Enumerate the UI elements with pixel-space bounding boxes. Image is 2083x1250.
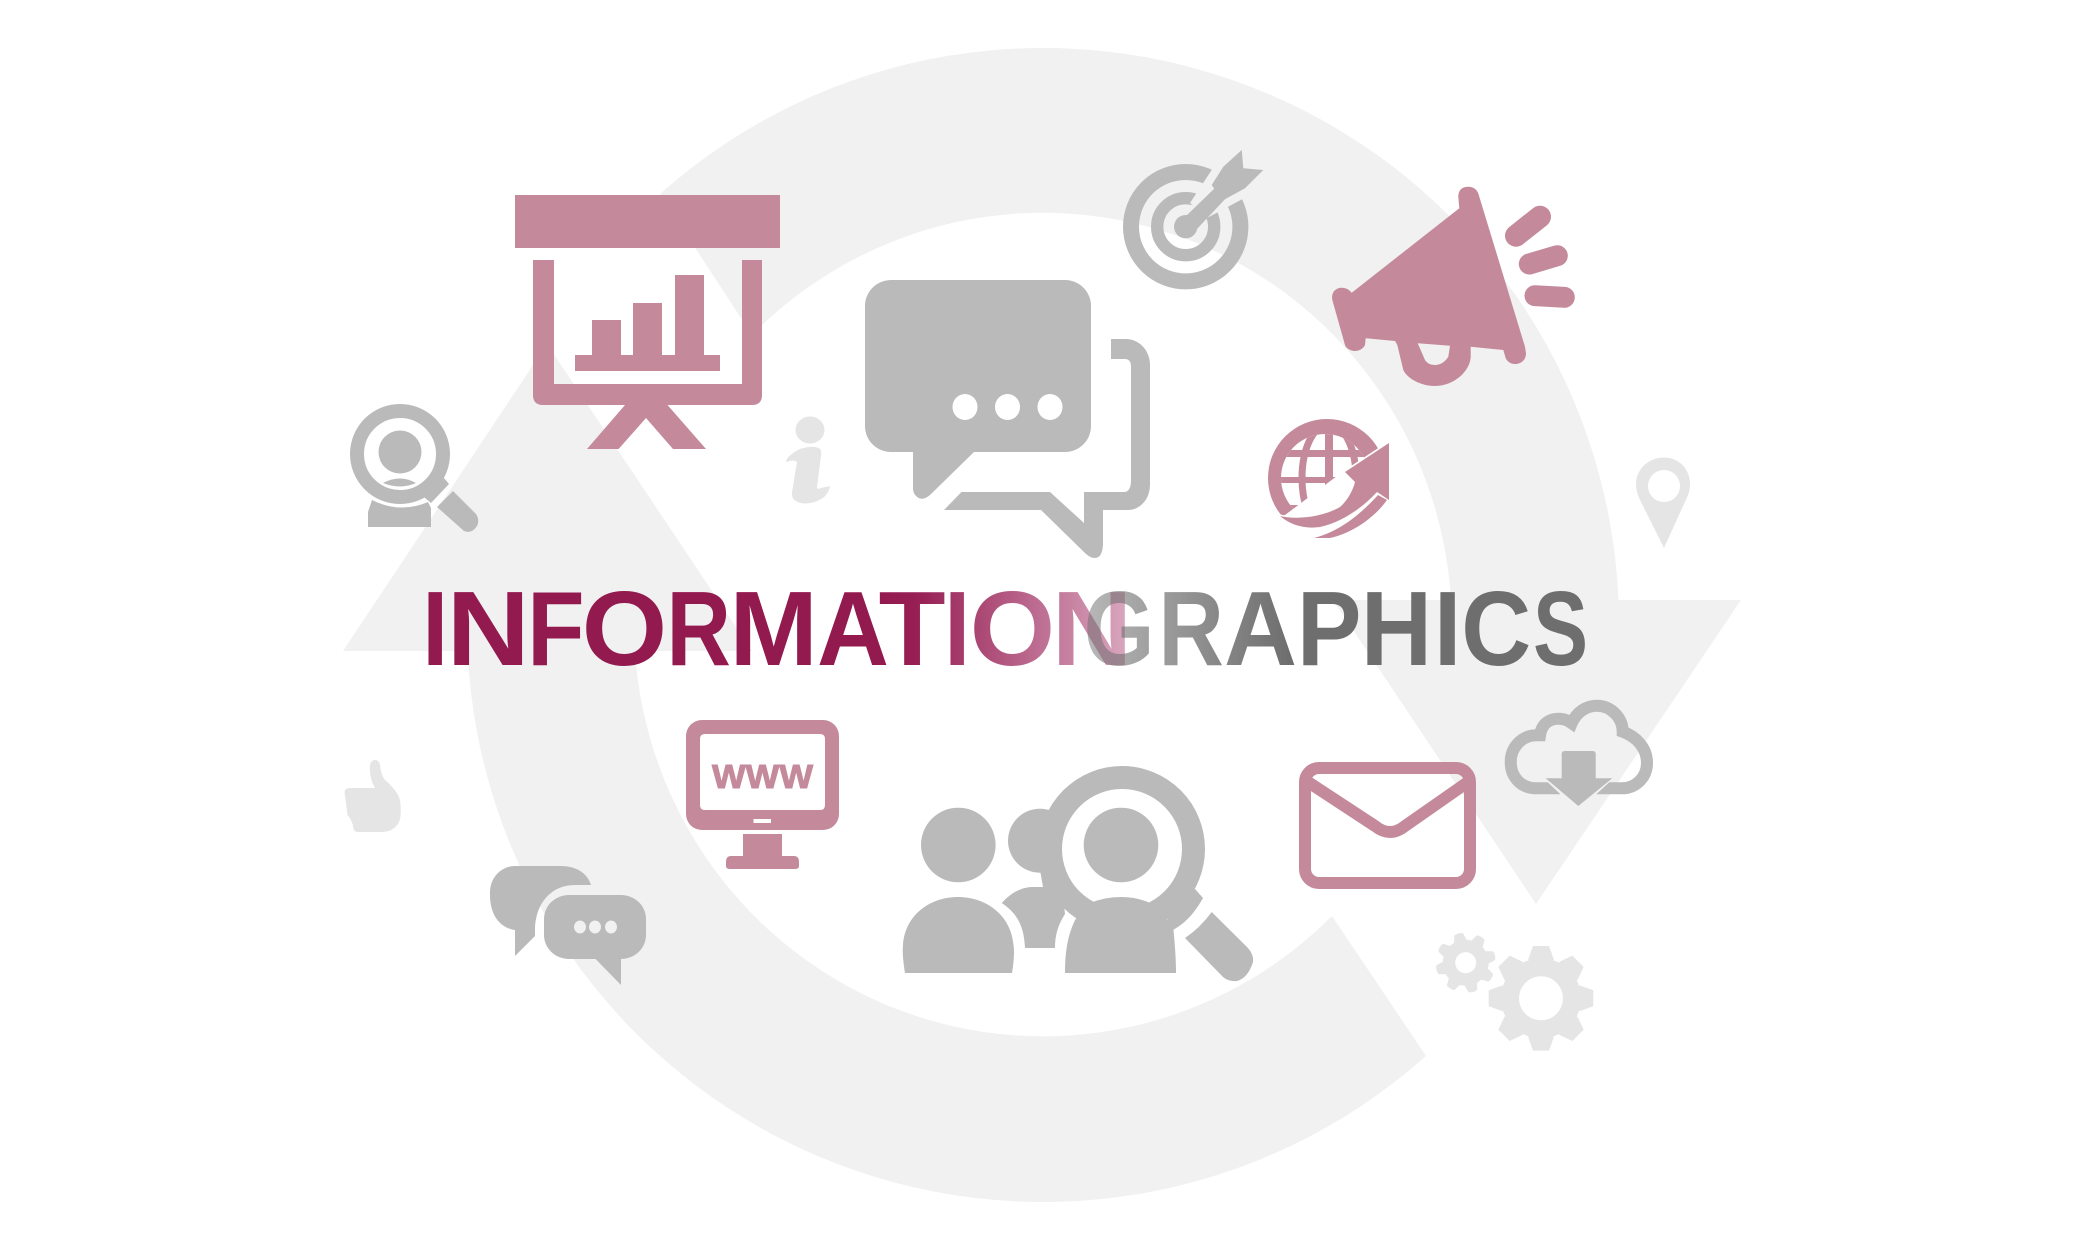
icon: speech bubbles with dots (865, 280, 1150, 558)
title word: graphics: A (1224, 570, 1297, 688)
title word: information: I (944, 570, 970, 688)
icon: thumbs up (344, 760, 401, 832)
icon: small speech bubbles (490, 866, 646, 985)
title word: information: I (422, 570, 448, 688)
title word: information: F (527, 570, 584, 688)
title word: graphics: H (1361, 570, 1432, 688)
icon: monitor with www (686, 720, 839, 869)
icon: map pin (1636, 458, 1690, 548)
title word: information: N (1052, 570, 1132, 688)
title word: information: A (817, 570, 889, 688)
icon: cloud download (1511, 706, 1647, 811)
title word: graphics: C (1461, 570, 1531, 688)
title word: graphics: G (1084, 570, 1154, 688)
title word: information: O (970, 570, 1055, 688)
icon: person in magnifier (357, 411, 478, 532)
title word: information: R (666, 570, 731, 688)
icon: large gear (1489, 946, 1593, 1051)
title word: information: M (730, 570, 818, 688)
www label: WWW (712, 758, 814, 795)
title word: graphics: I (1434, 570, 1462, 688)
background arrow: top arc (660, 48, 1741, 904)
icon: target with dart (1131, 150, 1263, 281)
title word: information: T (879, 570, 946, 688)
icon: presentation board with bar chart (515, 195, 780, 449)
title word: graphics: P (1297, 570, 1362, 688)
background arrow: bottom arc (343, 344, 1426, 1202)
icon: small gear (1429, 926, 1502, 999)
title word: information: N (447, 570, 530, 688)
icon: info letter (786, 416, 830, 503)
title word: graphics: R (1158, 570, 1224, 688)
title word: information: O (582, 570, 667, 688)
icon: envelope (1305, 768, 1470, 883)
title word: graphics: S (1533, 570, 1588, 688)
icon: people with magnifier (903, 778, 1253, 981)
title: information graphics (422, 570, 1588, 688)
icon: globe with arrow (1268, 419, 1395, 538)
icon: megaphone (1332, 187, 1564, 386)
